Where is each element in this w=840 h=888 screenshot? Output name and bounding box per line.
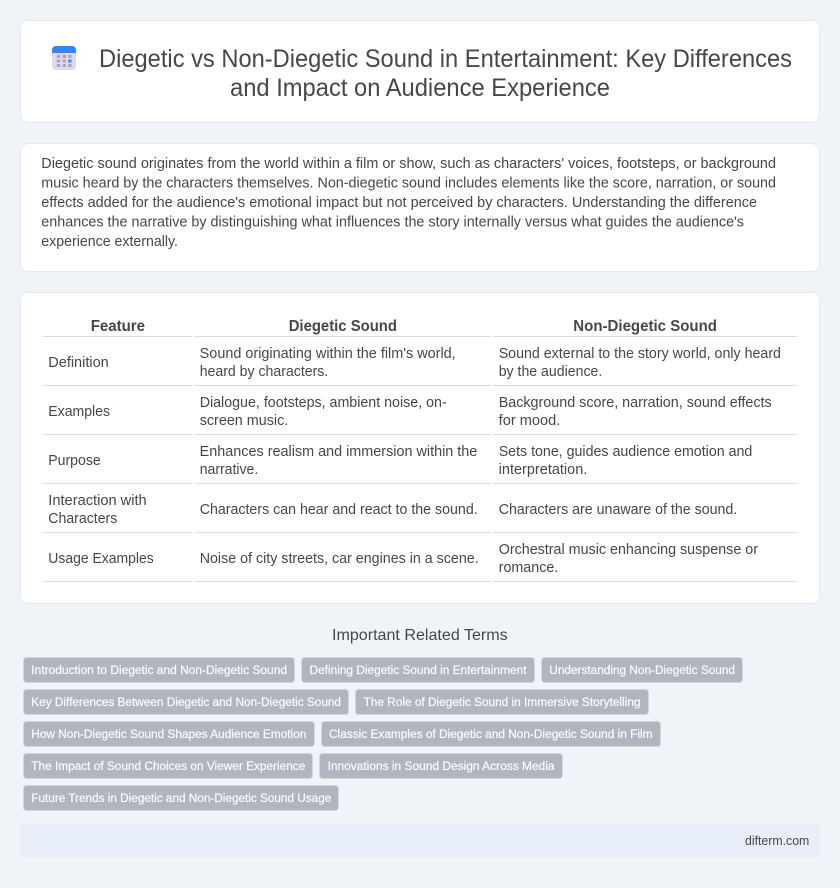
table row: definition: heard by characters.: [200, 364, 328, 380]
table row: definition: Definition: [48, 355, 109, 371]
table row: usage examples: romance.: [499, 560, 558, 576]
tag: [356, 690, 648, 714]
heading: important related terms: Important Related Terms: [332, 627, 508, 644]
table header row: [43, 318, 797, 337]
text block: introduction paragraph: [41, 156, 776, 250]
table row: examples: [43, 395, 797, 435]
footer bar: [20, 824, 820, 858]
text block: introduction paragraph: music heard by the characters themselves. Non-diegetic sound includes elements like the score, narration, or sound: [41, 176, 776, 192]
tag: Innovations in Sound Design Across Media: [328, 759, 555, 773]
tag: Defining Diegetic Sound in Entertainment: [310, 663, 527, 677]
table row: interaction with characters: [43, 493, 797, 533]
table row: interaction with characters: Characters are unaware of the sound.: [499, 502, 737, 518]
text block: introduction paragraph: effects added for the audience's emotional impact but not perceived by characters. Understanding the difference: [41, 195, 757, 211]
table row: examples: Background score, narration, sound effects: [499, 395, 772, 411]
table row: examples: Dialogue, footsteps, ambient noise, on-: [200, 395, 447, 411]
text block: introduction paragraph: enhances the narrative by distinguishing what influences the story internally versus what guides the audience's: [41, 214, 744, 230]
tag: [24, 722, 314, 746]
tag: [24, 786, 338, 810]
table row: examples: for mood.: [499, 413, 560, 429]
table row: usage examples: [43, 542, 797, 582]
tag: The Impact of Sound Choices on Viewer Experience: [31, 759, 306, 773]
title: [99, 45, 792, 102]
tag: Understanding Non-Diegetic Sound: [549, 663, 735, 677]
panel: related term tags: [24, 658, 742, 810]
table header row: Feature: [91, 318, 145, 335]
text block: introduction paragraph: Diegetic sound originates from the world within a film or show, such as characters' voices, footsteps, or background: [41, 156, 776, 172]
tag: [542, 658, 742, 682]
table row: definition: Sound external to the story world, only heard: [499, 346, 781, 362]
table row: purpose: Sets tone, guides audience emotion and: [499, 444, 752, 460]
table row: purpose: interpretation.: [499, 462, 587, 478]
tag: [24, 658, 294, 682]
table row: purpose: Purpose: [48, 453, 101, 469]
tag: Future Trends in Diegetic and Non-Diegetic Sound Usage: [31, 791, 332, 805]
table row: definition: Sound originating within the film's world,: [200, 346, 456, 362]
table row: purpose: narrative.: [200, 462, 258, 478]
title: and Impact on Audience Experience: [230, 74, 610, 102]
table row: interaction with characters: Characters: [48, 511, 117, 527]
table row: examples: screen music.: [200, 413, 288, 429]
table row: interaction with characters: Characters can hear and react to the sound.: [200, 502, 478, 518]
footer bar: difterm.com: [745, 833, 809, 848]
tag: Key Differences Between Diegetic and Non-Diegetic Sound: [31, 695, 341, 709]
title: Diegetic vs Non-Diegetic Sound in Entertainment: Key Differences: [99, 45, 792, 73]
table row: usage examples: Usage Examples: [48, 551, 154, 567]
tag: [302, 658, 534, 682]
icon: calendar grid: [52, 46, 76, 70]
table row: usage examples: Noise of city streets, car engines in a scene.: [200, 551, 479, 567]
tag: [24, 690, 348, 714]
panel: header card: [20, 20, 820, 122]
table row: examples: Examples: [48, 404, 110, 420]
tag: [24, 754, 312, 778]
table row: purpose: Enhances realism and immersion within the: [200, 444, 477, 460]
tag: Introduction to Diegetic and Non-Diegetic Sound: [31, 663, 287, 677]
table row: definition: [43, 346, 797, 386]
tag: The Role of Diegetic Sound in Immersive Storytelling: [364, 695, 640, 709]
table header row: Diegetic Sound: [289, 318, 397, 335]
tag: [320, 754, 562, 778]
table row: definition: by the audience.: [499, 364, 602, 380]
tag: [322, 722, 660, 746]
table row: usage examples: Orchestral music enhancing suspense or: [499, 542, 758, 558]
table header row: Non-Diegetic Sound: [573, 318, 717, 335]
panel: comparison table card: [20, 292, 820, 604]
table row: interaction with characters: Interaction with: [48, 493, 147, 509]
table row: purpose: [43, 444, 797, 484]
tag: Classic Examples of Diegetic and Non-Diegetic Sound in Film: [329, 727, 652, 741]
panel: introduction text card: [20, 144, 820, 272]
text block: introduction paragraph: experience externally.: [41, 234, 178, 250]
tag: How Non-Diegetic Sound Shapes Audience Emotion: [31, 727, 306, 741]
